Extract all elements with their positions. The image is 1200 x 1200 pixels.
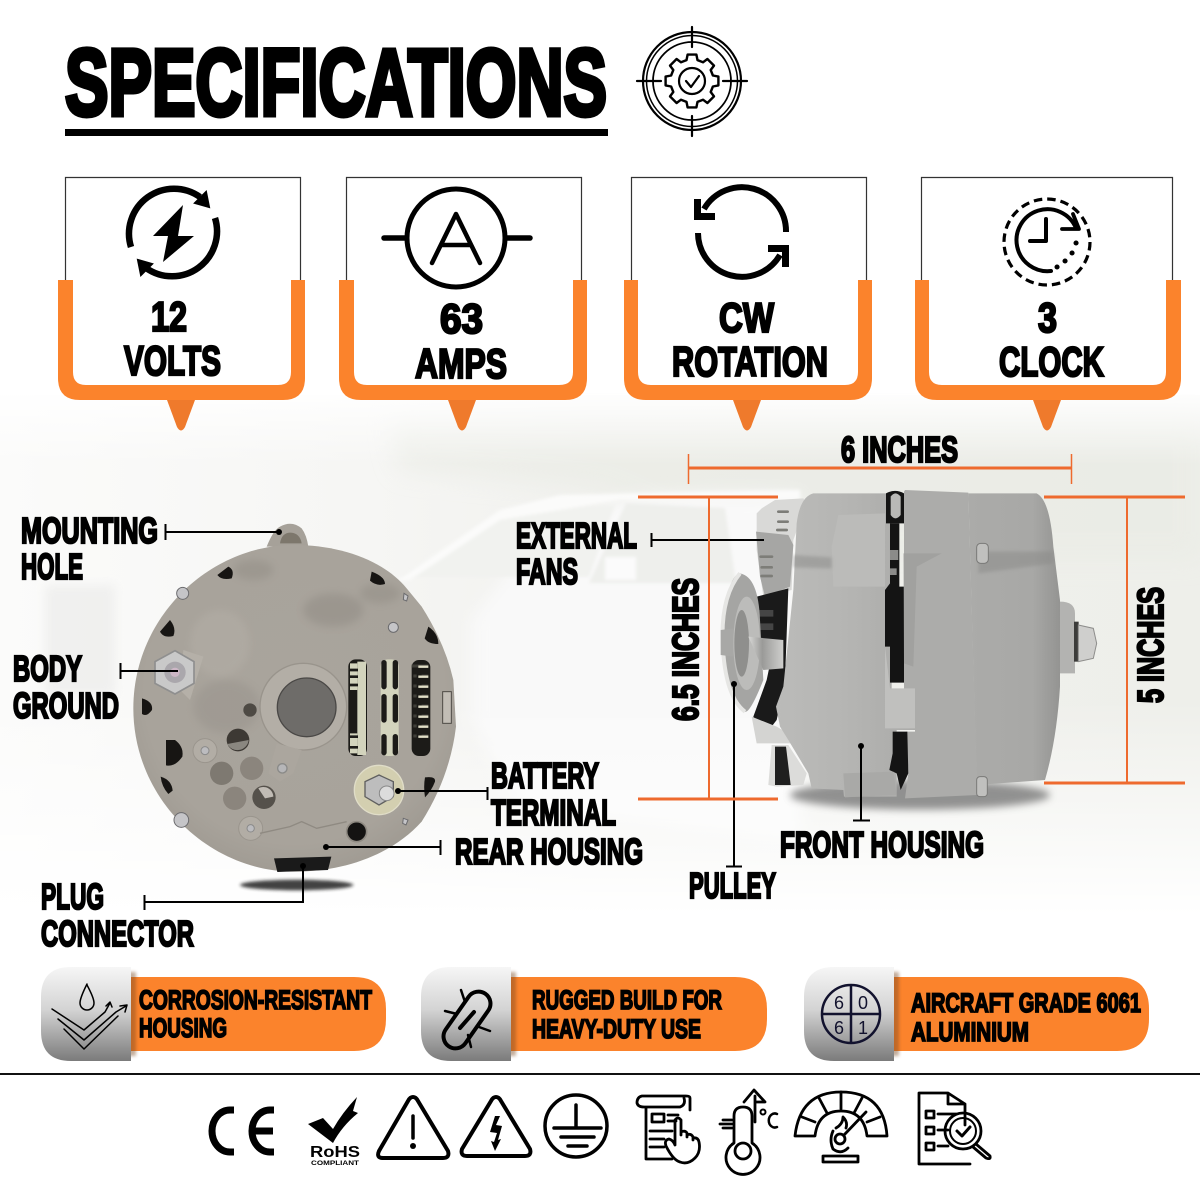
value: 63: [440, 295, 483, 342]
icon: RoHS compliant: RoHS: [310, 1144, 360, 1161]
pulley: [721, 573, 763, 712]
label: battery terminal: [491, 755, 616, 833]
lighter casting: [903, 553, 942, 667]
icon: thermometer: [720, 1090, 777, 1174]
panel inner: [354, 278, 573, 386]
icon: 6061 disc: 6: [834, 993, 844, 1013]
feature pill: [125, 977, 386, 1051]
leader: external fans: [651, 533, 764, 547]
leader: rear housing: [326, 840, 440, 855]
orange bracket: [624, 280, 872, 400]
value: 3: [1038, 294, 1057, 341]
photo: alternator side view: [721, 490, 1097, 810]
icon: rotation arrows: [694, 187, 789, 277]
raised lower block: [885, 647, 915, 728]
terminal bore: [347, 822, 367, 842]
feature text: [911, 988, 1141, 1047]
icon tile: [41, 967, 131, 1061]
label: mounting hole: HOLE: [21, 546, 83, 587]
pointer: [167, 400, 195, 430]
label: battery terminal: TERMINAL: [491, 792, 616, 833]
waist groove: [793, 552, 1053, 573]
dimension: 5 inches: [1044, 497, 1185, 783]
shaft bolt: [1060, 602, 1097, 673]
dot: rear housing: [323, 844, 329, 850]
dot: battery terminal: [395, 788, 401, 794]
leader: front housing: [853, 746, 870, 820]
boss screw 2: [239, 816, 263, 840]
bore cluster: [210, 729, 276, 810]
label: plug connector: [41, 876, 194, 954]
feature text: HOUSING: [139, 1013, 227, 1043]
dot: plug connector: [300, 863, 306, 869]
tile shadow: [506, 972, 516, 1056]
dark fan interior: [750, 588, 788, 742]
panel outline: [66, 178, 300, 280]
orange bracket: [58, 280, 305, 400]
rear cover: [968, 493, 1060, 785]
footer divider: [0, 1073, 1200, 1075]
icon: 6061 disc: 0: [858, 993, 868, 1013]
label: body ground: BODY: [13, 648, 82, 689]
icon: drop and layers: [52, 984, 127, 1049]
icon: ammeter: [384, 189, 530, 287]
feature text: [139, 985, 372, 1043]
label: pulley: PULLEY: [689, 865, 776, 906]
shadow: [240, 880, 353, 890]
panel: 3 clock: [915, 178, 1181, 430]
title: SPECIFICATIONS: [65, 30, 607, 136]
bearing tab: [268, 743, 302, 782]
pointer: [1033, 400, 1061, 430]
value: 12: [151, 293, 187, 340]
unit: CLOCK: [999, 338, 1104, 385]
label: battery terminal: BATTERY: [491, 755, 599, 796]
battery terminal: [354, 765, 404, 815]
raised terminal outline: [260, 822, 347, 833]
label: plug connector: CONNECTOR: [41, 913, 194, 954]
panel inner: [639, 278, 858, 386]
mounting hole: [280, 533, 302, 543]
label: 6.5 inches: 6.5 INCHES: [665, 578, 706, 721]
icon: 6061 disc: 1: [858, 1018, 868, 1038]
label: 6 inches: 6 INCHES: [841, 429, 958, 470]
leader: mounting hole: [165, 524, 278, 540]
mounting ear: [267, 524, 308, 547]
seam pin: [891, 493, 901, 518]
icon: target gear check: [637, 27, 747, 136]
dot: pulley: [731, 681, 737, 687]
vent slot 2: [381, 659, 399, 756]
shadow: [790, 780, 1050, 810]
icon: 6061 disc: [822, 985, 880, 1043]
title underline: [65, 129, 608, 136]
label: front housing: FRONT HOUSING: [780, 824, 984, 865]
photo: alternator rear view: [133, 524, 456, 890]
vent slot 3: [412, 660, 430, 756]
raised block: [832, 513, 885, 587]
body ground bolt: [155, 650, 203, 700]
label: plug connector: PLUG: [41, 876, 104, 917]
unit: VOLTS: [124, 337, 221, 384]
feature text: CORROSION-RESISTANT: [139, 985, 372, 1015]
foot: [843, 772, 897, 797]
dot: mounting hole: [276, 529, 282, 535]
icon tile: [804, 967, 894, 1061]
surface blotches: [190, 560, 400, 733]
feature text: HEAVY-DUTY USE: [532, 1014, 701, 1044]
dot: front housing: [858, 743, 864, 749]
unit: ROTATION: [672, 338, 828, 385]
orange bracket: [339, 280, 587, 400]
panel: 12 volts: [58, 178, 305, 430]
plug connector: [274, 857, 331, 872]
feature pill: [888, 977, 1149, 1051]
dimension: 6.5 inches: [638, 497, 778, 799]
icon: CE mark: [212, 1110, 274, 1152]
label: external fans: [516, 515, 637, 592]
icon: manual with hand: [637, 1096, 700, 1163]
upper fan blades: [757, 498, 807, 597]
label: mounting hole: MOUNTING: [21, 510, 158, 551]
label: body ground: [13, 648, 119, 726]
icon: bolt in cycle arrows: [129, 189, 217, 276]
side tab: [443, 692, 451, 723]
housing bolts: [977, 543, 988, 797]
icon: broken chain: [439, 987, 495, 1053]
label: external fans: EXTERNAL: [516, 515, 637, 556]
leader: pulley: [726, 684, 742, 866]
panel inner: [73, 278, 291, 386]
feature pill: [505, 977, 767, 1051]
label: body ground: GROUND: [13, 685, 119, 726]
panel outline: [632, 178, 866, 280]
rim screws: [174, 587, 408, 827]
feature text: [532, 985, 722, 1044]
black seam: [885, 491, 908, 790]
icon: RoHS compliant: [308, 1097, 360, 1167]
leader: body ground: [120, 663, 178, 679]
panel: CW rotation: [624, 178, 872, 430]
label: external fans: FANS: [516, 551, 578, 592]
icon tile: [421, 967, 511, 1061]
icon: warning triangle: [378, 1097, 448, 1158]
rear bearing boss: [260, 663, 347, 750]
feature text: ALUMINIUM: [911, 1017, 1029, 1047]
feature text: RUGGED BUILD FOR: [532, 985, 722, 1015]
leader: battery terminal: [398, 787, 488, 800]
leader: plug connector: [144, 866, 303, 910]
label: mounting hole: [21, 510, 158, 587]
label: rear housing: REAR HOUSING: [455, 831, 643, 872]
feature: aircraft grade aluminium: [804, 967, 1149, 1061]
icon: temperature gauge: [795, 1092, 887, 1162]
small bore: [243, 703, 257, 717]
icon: 6061 disc: 6: [834, 1018, 844, 1038]
feature: rugged build: [421, 967, 767, 1061]
panel outline: [922, 178, 1172, 280]
feature: corrosion-resistant housing: [41, 967, 386, 1061]
icon: checklist with magnifier: [919, 1093, 990, 1164]
tile shadow: [889, 972, 899, 1056]
vent slot 1: [348, 659, 367, 756]
front housing: [776, 493, 915, 797]
icon: clock: [1004, 199, 1090, 285]
mounting holes around rim: [142, 567, 438, 797]
dimension: 6 inches: [688, 454, 1072, 484]
value: CW: [719, 294, 774, 341]
icon: high voltage triangle: [462, 1097, 530, 1156]
middle housing: [904, 490, 977, 798]
body: [133, 545, 456, 872]
orange bracket: [915, 280, 1181, 400]
tile shadow: [126, 972, 136, 1056]
panel outline: [346, 178, 582, 280]
label: 5 inches: 5 INCHES: [1130, 587, 1171, 703]
lower fan blades: [748, 637, 783, 670]
panel inner: [929, 278, 1166, 386]
boss screw 1: [193, 739, 217, 763]
icon: RoHS compliant: COMPLIANT: [311, 1160, 359, 1167]
icon: earth ground: [545, 1095, 607, 1157]
panel: 63 amps: [339, 178, 587, 430]
pointer: [448, 400, 476, 430]
unit: AMPS: [415, 340, 507, 387]
pointer: [733, 400, 761, 430]
